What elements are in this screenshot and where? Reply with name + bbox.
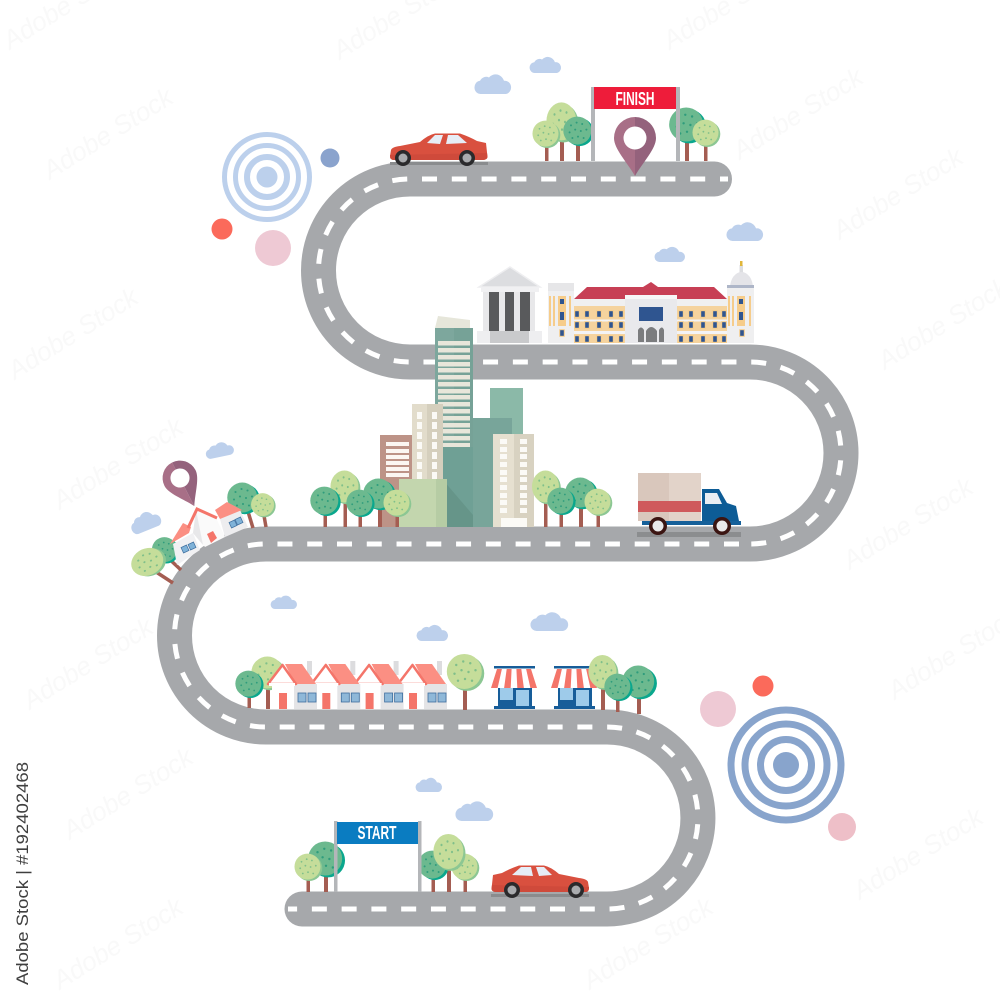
right beige tower <box>493 434 534 527</box>
red car bottom <box>491 866 589 898</box>
finish sign: FINISH <box>616 89 654 109</box>
stock id vertical text: Adobe Stock | #192402468 <box>13 762 32 985</box>
red car top <box>390 134 488 166</box>
tree right of houses <box>447 654 484 710</box>
background watermark: Adobe Stock <box>36 80 180 186</box>
house on bend <box>170 502 248 565</box>
target circles bottom right <box>700 676 856 841</box>
trees left of houses <box>235 657 286 709</box>
beige tower <box>412 404 443 480</box>
start sign <box>334 821 422 892</box>
palace building <box>548 261 754 343</box>
back pale tower <box>435 316 470 328</box>
background watermark: Adobe Stock <box>56 740 200 846</box>
mid teal tower <box>473 418 512 527</box>
back green block <box>490 388 523 434</box>
background watermark: Adobe Stock <box>46 890 190 996</box>
background watermark: Adobe Stock <box>846 800 990 906</box>
palace windows <box>574 310 727 343</box>
map pin at finish <box>614 117 656 176</box>
background watermark: Adobe Stock <box>16 610 160 716</box>
city skyscrapers <box>380 316 534 527</box>
start sign: START <box>358 823 396 843</box>
finish sign <box>591 87 680 161</box>
palace right tower <box>727 261 754 343</box>
palace left tower <box>548 283 574 343</box>
row of houses <box>268 661 447 709</box>
winding road <box>174 179 841 909</box>
palace roof <box>574 282 727 299</box>
trees beside finish sign <box>532 102 720 161</box>
trees beside start sign <box>294 834 479 892</box>
background watermark: Adobe Stock <box>1 280 145 386</box>
palace wings <box>574 299 727 343</box>
temple building <box>477 267 542 343</box>
shops <box>491 666 597 709</box>
trees on left bend <box>127 483 276 583</box>
trees right of city <box>532 471 612 527</box>
background watermark: Adobe Stock <box>826 140 970 246</box>
delivery truck <box>637 473 741 537</box>
teal base block <box>443 447 473 527</box>
target circles top left <box>212 134 340 266</box>
background watermark: Adobe Stock <box>836 470 980 576</box>
trees left of city <box>310 471 411 527</box>
background watermark: Adobe Stock <box>576 890 720 996</box>
tall teal tower <box>435 328 473 527</box>
clouds <box>127 57 763 821</box>
background watermark: Adobe Stock <box>46 410 190 516</box>
background watermark: Adobe Stock <box>726 60 870 166</box>
light green block <box>399 479 447 527</box>
map pin on left <box>157 455 210 514</box>
palace central block <box>625 295 677 343</box>
pink building <box>380 435 415 527</box>
trees right of shops <box>588 655 657 714</box>
